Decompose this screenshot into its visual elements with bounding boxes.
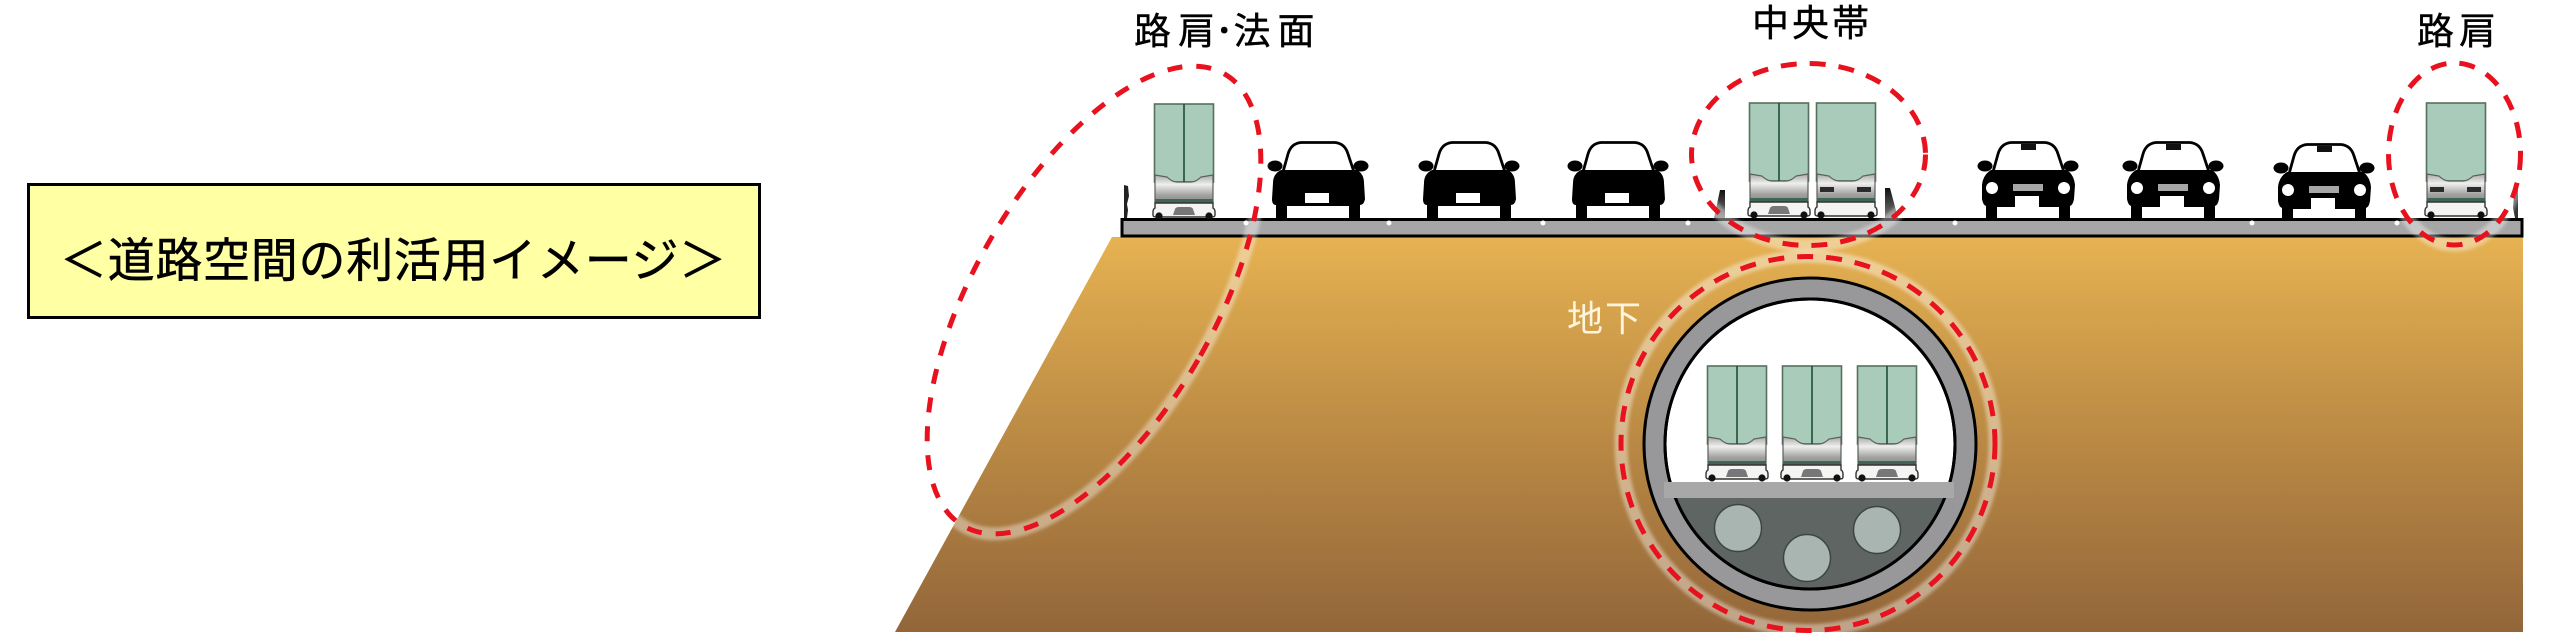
pipe 2 xyxy=(1784,534,1830,582)
median highlight xyxy=(1692,64,1926,246)
car rear 1 xyxy=(1268,142,1368,219)
label: shoulder and slope: 路肩･法面 xyxy=(1134,11,1314,52)
road deck xyxy=(1122,220,2522,236)
pipe 3 xyxy=(1854,506,1900,554)
truck on shoulder xyxy=(1153,104,1215,220)
car rear 3 xyxy=(1568,142,1668,219)
car front 2 xyxy=(2122,142,2224,219)
pipe 1 xyxy=(1714,504,1762,552)
ground embankment xyxy=(895,237,2523,632)
car rear 2 xyxy=(1418,142,1520,219)
tunnel truck 2 xyxy=(1781,366,1843,482)
tunnel truck 1 xyxy=(1706,366,1768,482)
car front 1 xyxy=(1978,142,2078,219)
tunnel utility bay xyxy=(1677,498,1943,588)
underground tunnel xyxy=(1644,278,1976,610)
title box xyxy=(28,184,760,318)
right roadside barrier xyxy=(2513,183,2518,218)
title text: ＜道路空間の利活用イメージ＞ xyxy=(60,234,727,287)
label: right shoulder: 路肩 xyxy=(2417,11,2501,52)
truck on right shoulder xyxy=(2425,103,2487,219)
tunnel truck 3 xyxy=(1856,366,1918,482)
label: median: 中央帯 xyxy=(1752,3,1872,44)
label: underground: 地下 xyxy=(1567,298,1643,339)
median barrier right xyxy=(1885,188,1898,218)
tunnel road slab xyxy=(1664,482,1954,498)
car front 3 xyxy=(2274,144,2374,221)
median barrier left xyxy=(1714,190,1725,218)
slope highlight: shoulder and slope xyxy=(860,14,1328,586)
median truck front xyxy=(1815,103,1877,219)
median truck rear xyxy=(1748,103,1810,219)
right shoulder highlight xyxy=(2388,63,2520,245)
underground highlight xyxy=(1621,256,1995,630)
left roadside barrier xyxy=(1124,185,1129,218)
